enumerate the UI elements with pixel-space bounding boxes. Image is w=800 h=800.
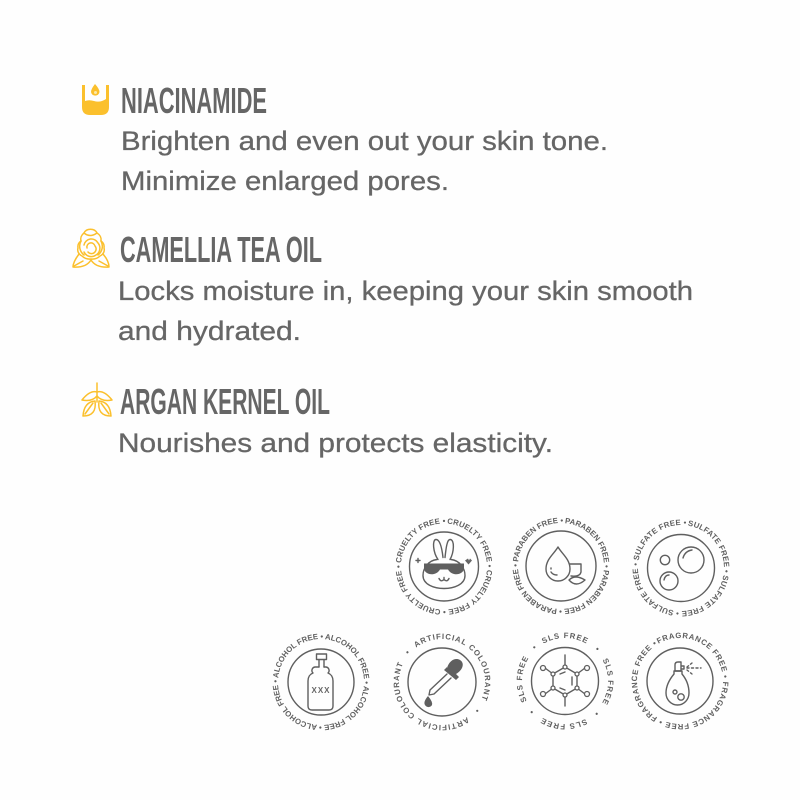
icon: dropper: [424, 659, 463, 707]
badge: sls free: SLS FREE • SLS FREE • SLS FREE • SLS FREE •: [516, 632, 614, 730]
text: niacinamide line 2: Minimize enlarged pores.: [121, 166, 449, 196]
icon: bubbles: [660, 547, 704, 590]
badge: fragrance free: FRAGRANCE FREE • FRAGRANCE FREE • FRAGRANCE FREE •: [632, 632, 728, 730]
badge: sulfate free: SULFATE FREE • SULFATE FREE • SULFATE FREE • SULFATE FREE •: [632, 520, 730, 616]
text: camellia line 1: Locks moisture in, keeping your skin smooth: [118, 276, 693, 306]
section: argan kernel oil: [82, 381, 553, 458]
badge: alcohol free: ALCOHOL FREE • ALCOHOL FREE • ALCOHOL FREE • ALCOHOL FREE •: [272, 634, 370, 730]
section: camellia tea oil: [73, 229, 693, 346]
icon: perfume spray: [666, 662, 701, 705]
heading: argan kernel oil: ARGAN KERNEL OIL: [120, 381, 330, 422]
icon: drop with leaves: [546, 547, 585, 584]
text: niacinamide line 1: Brighten and even out your skin tone.: [121, 126, 608, 156]
text: argan description: Nourishes and protects elasticity.: [118, 428, 553, 458]
badge: paraben free: PARABEN FREE • PARABEN FREE • PARABEN FREE • PARABEN FREE •: [512, 518, 610, 614]
icon: niacinamide bowl: [82, 84, 109, 115]
icon: molecule: [540, 655, 590, 706]
heading: camellia tea oil: CAMELLIA TEA OIL: [120, 229, 322, 270]
badge: cruelty free: CRUELTY FREE • CRUELTY FREE • CRUELTY FREE • CRUELTY FREE •: [396, 518, 492, 615]
heading: niacinamide: NIACINAMIDE: [121, 80, 267, 121]
icon: rabbit with sunglasses: [416, 540, 472, 588]
icon: bottle: XXX: [311, 686, 331, 695]
badge: artificial colourant: ARTIFICIAL COLOURANT • ARTIFICIAL COLOURANT •: [394, 634, 490, 730]
text: camellia line 2: and hydrated.: [118, 316, 301, 346]
icon: argan branch: [82, 383, 112, 416]
section: niacinamide: [82, 80, 608, 196]
icon: camellia flower: [73, 229, 109, 267]
